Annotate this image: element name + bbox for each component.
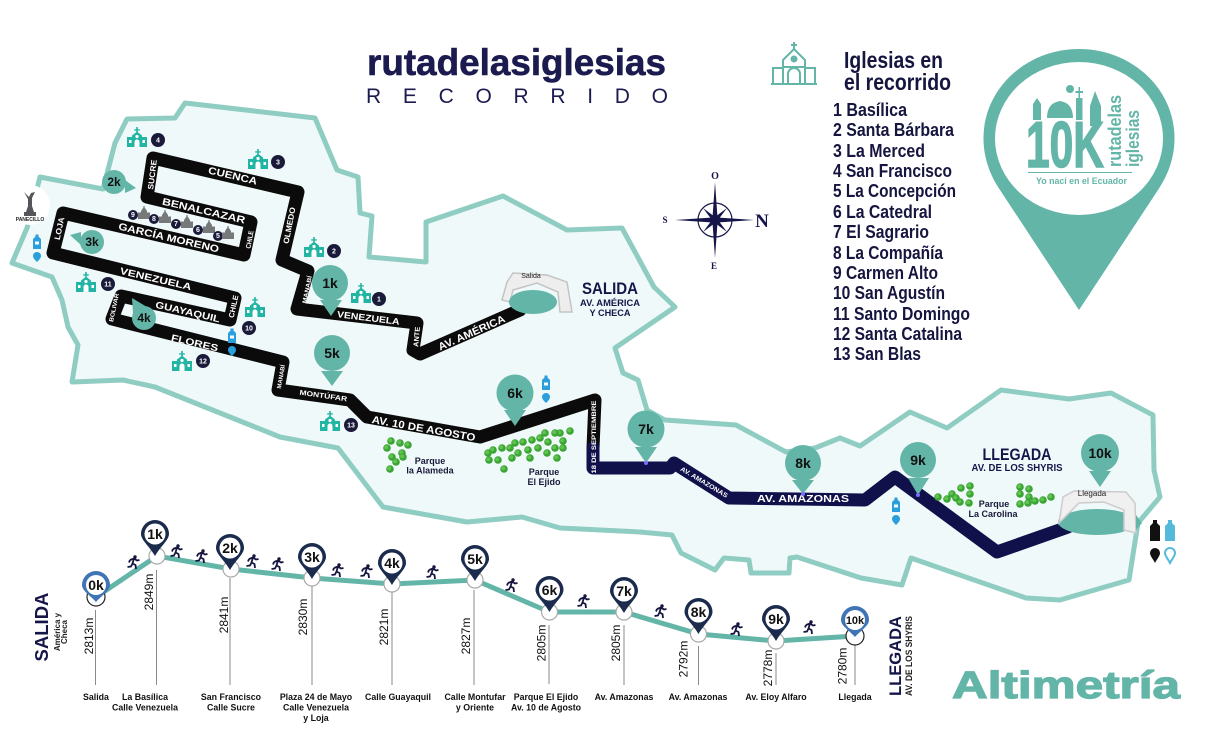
list of churches: 9 Carmen Alto (833, 263, 938, 283)
street labels (53, 159, 849, 505)
list of churches: 11 Santo Domingo (833, 304, 970, 324)
big location pin logo (984, 49, 1174, 310)
street labels: CUENCA (207, 166, 258, 188)
km pins: 8k (691, 604, 706, 620)
park: La Carolina (934, 482, 1055, 519)
label: chart salida: América y (53, 612, 62, 651)
big location pin logo: Yo nací en el Ecuador (1036, 176, 1127, 186)
km markers on map: 2k (107, 175, 121, 189)
heading: churches (844, 47, 951, 95)
label: chart llegada: LLEGADA (887, 616, 905, 696)
church markers on map: 1 (377, 296, 381, 304)
central churches 5 to 9: 5 (216, 233, 220, 240)
church markers on map: 13 (347, 422, 355, 430)
street labels: GARCÍA MORENO (117, 220, 221, 256)
park: la Alameda: Parque (415, 456, 445, 466)
km pins: 4k (384, 555, 400, 571)
altitude labels: 2821m (377, 609, 391, 645)
llegada arch: Llegada (1078, 489, 1107, 498)
altitude labels: 2830m (296, 599, 310, 635)
street labels: ANTE (413, 326, 422, 347)
altitude labels: 2813m (82, 618, 96, 654)
label: salida: SALIDA (582, 279, 638, 298)
park: La Carolina: Parque (979, 499, 1009, 509)
km markers on map: 5k (324, 345, 340, 361)
km pins: 2k (222, 540, 238, 556)
location captions: Av. Amazonas (669, 692, 728, 702)
list of churches (833, 100, 970, 364)
km markers on map: 10k (1088, 445, 1112, 461)
list of churches: 5 La Concepción (833, 181, 956, 201)
km pins: 10k (846, 615, 865, 627)
title (366, 42, 668, 108)
list of churches: 4 San Francisco (833, 161, 952, 181)
elevation profile chart (82, 520, 872, 723)
location captions: Av. Amazonas (595, 692, 654, 702)
altitude labels: 2780m (836, 648, 850, 684)
elevation nodes (87, 548, 864, 649)
location captions: San Francisco (201, 692, 262, 702)
km markers on map: 9k (910, 452, 926, 468)
central churches 5 to 9: 9 (131, 212, 135, 219)
location captions: y Loja (303, 713, 329, 723)
icon: compass rose (662, 171, 769, 271)
street labels: BENALCAZAR (161, 197, 247, 227)
salida arch: Salida (521, 273, 541, 280)
altitude labels: 2792m (676, 641, 690, 677)
street labels: AV. AMAZONAS (679, 466, 729, 500)
church markers on map: 3 (276, 160, 280, 166)
panel: route map boundary (12, 103, 1160, 600)
km pins: 6k (542, 582, 557, 598)
street labels: VENEZUELA (336, 309, 401, 327)
location captions (83, 692, 872, 723)
label: salida (580, 279, 640, 319)
park: la Alameda (383, 437, 455, 476)
altitude labels: 2805m (609, 625, 623, 661)
location captions: Calle Venezuela (283, 702, 349, 712)
altitude labels: 2841m (217, 597, 231, 633)
label: salida: Y CHECA (590, 308, 631, 319)
label: chart salida (31, 593, 69, 661)
list of churches: 12 Santa Catalina (833, 324, 963, 344)
location captions: Calle Sucre (207, 702, 255, 712)
big location pin logo: rutadelas (1105, 95, 1125, 167)
central churches 5 to 9: 6 (196, 227, 200, 234)
label: llegada: LLEGADA (982, 445, 1052, 464)
street labels: CHILE (227, 294, 240, 319)
location captions: y Oriente (456, 702, 494, 712)
list of churches: 7 El Sagrario (833, 222, 929, 242)
km pins: 7k (616, 583, 632, 599)
street labels: AV. AMAZONAS (757, 493, 849, 505)
park: la Alameda: la Alameda (406, 466, 455, 476)
central churches 5 to 9: 7 (174, 221, 178, 228)
runner icons (128, 544, 816, 636)
km markers on map: 8k (795, 455, 811, 471)
street labels: SUCRE (146, 159, 159, 190)
icon: supply legend bottles (1150, 520, 1175, 563)
km markers on map (70, 170, 1119, 497)
street labels: GUAYAQUIL (154, 300, 221, 325)
km pins: 1k (147, 526, 163, 542)
label: chart salida: Checa (60, 619, 69, 644)
street labels: MANABÍ (300, 275, 314, 304)
icon: compass rose: O (711, 171, 719, 182)
street labels: MANABÍ (275, 364, 287, 389)
church markers on map: 10 (245, 326, 253, 332)
street labels: VENEZUELA (119, 266, 193, 293)
list of churches: 6 La Catedral (833, 202, 932, 222)
big location pin logo: 10K (1026, 108, 1104, 181)
km markers on map: 7k (638, 421, 654, 437)
label: llegada: AV. DE LOS SHYRIS (972, 463, 1063, 474)
central churches 5 to 9 (128, 206, 234, 241)
label: chart llegada: AV. DE LOS SHYRIS (904, 616, 915, 696)
km pins: 9k (768, 611, 784, 627)
heading: churches: Iglesias en (844, 47, 943, 73)
llegada arch (1058, 489, 1142, 535)
icon: compass rose: N (755, 211, 769, 232)
icon: Panecillo statue: PANECILLO (16, 217, 44, 223)
label: salida: AV. AMÉRICA (580, 298, 640, 309)
location captions: Av. 10 de Agosto (511, 702, 582, 712)
icon: church outline (771, 42, 817, 84)
label: llegada (972, 445, 1063, 474)
location captions: La Basílica (122, 692, 168, 702)
icon: compass rose: S (662, 215, 668, 225)
km markers on map: 6k (507, 385, 523, 401)
list of churches: 10 San Agustín (833, 283, 945, 303)
street labels: CHILE (246, 230, 256, 249)
km markers on map: 3k (85, 235, 99, 249)
title: rutadelasiglesias (367, 42, 666, 83)
heading: Altimetría: Altimetría (952, 665, 1181, 707)
street labels: OLMEDO (282, 207, 297, 245)
km markers on map: 1k (322, 275, 338, 291)
icon: Panecillo statue (10, 185, 50, 225)
big location pin logo: iglesias (1123, 110, 1143, 167)
street labels: MONTÚFAR (299, 388, 348, 403)
km pins (82, 520, 869, 641)
altitude drop lines (96, 570, 855, 685)
street labels: LOJA (53, 216, 66, 241)
km pins: 3k (304, 549, 320, 565)
church markers on map (76, 127, 386, 432)
title: RECORRIDO (366, 85, 668, 108)
list of churches: 2 Santa Bárbara (833, 120, 955, 140)
icon: compass rose: E (711, 261, 717, 271)
location captions: Llegada (838, 692, 872, 702)
altitude labels: 2805m (534, 625, 548, 661)
altitude labels: 2778m (761, 650, 775, 686)
list of churches: 8 La Compañía (833, 243, 944, 263)
location captions: Plaza 24 de Mayo (280, 692, 353, 702)
street labels: BOLIVAR (109, 292, 121, 323)
location captions: Calle Montufar (444, 692, 506, 702)
church markers on map: 11 (104, 282, 112, 288)
list of churches: 3 La Merced (833, 141, 925, 161)
altitude labels: 2827m (459, 618, 473, 654)
elevation line (96, 556, 855, 641)
location captions: Calle Venezuela (112, 702, 178, 712)
route line (53, 158, 1068, 552)
location captions: Av. Eloy Alfaro (745, 692, 807, 702)
park: El Ejido (484, 427, 574, 487)
label: chart salida: SALIDA (31, 593, 52, 661)
heading: churches: el recorrido (844, 69, 951, 95)
location captions: Calle Guayaquil (365, 692, 431, 702)
km markers on map: 4k (137, 311, 151, 325)
label: chart llegada (887, 616, 915, 696)
church markers on map: 2 (332, 248, 336, 256)
street labels: 18 DE SEPTIEMBRE (592, 400, 598, 474)
list of churches: 13 San Blas (833, 344, 921, 364)
street labels: AV. AMÉRICA (436, 312, 508, 353)
list of churches: 1 Basílica (833, 100, 908, 120)
altitude labels (82, 574, 850, 686)
street labels: AV. 10 DE AGOSTO (371, 414, 476, 444)
park: La Carolina: La Carolina (968, 509, 1018, 519)
park: El Ejido: El Ejido (527, 477, 561, 487)
street labels: FLORES (170, 333, 219, 354)
park: El Ejido: Parque (529, 467, 559, 477)
km pins: 0k (88, 577, 104, 593)
water stations (33, 234, 900, 525)
central churches 5 to 9: 8 (152, 216, 156, 223)
church markers on map: 12 (199, 358, 207, 366)
altitude labels: 2849m (142, 574, 156, 610)
church markers on map: 4 (156, 138, 160, 144)
km pins: 5k (467, 551, 483, 567)
salida arch (502, 273, 572, 314)
location captions: Parque El Ejido (514, 692, 579, 702)
location captions: Salida (83, 692, 109, 702)
